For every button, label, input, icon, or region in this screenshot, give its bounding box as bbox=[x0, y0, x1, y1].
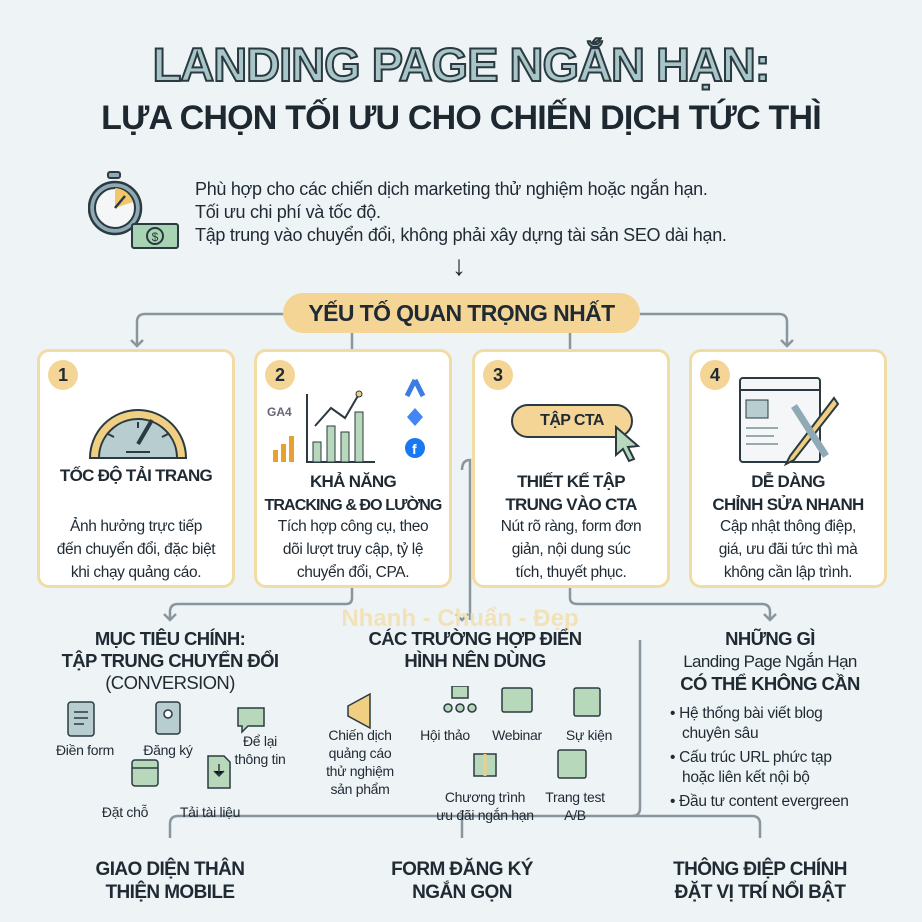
section: use cases: Webinar bbox=[492, 727, 542, 743]
card 4: không cần lập trình. bbox=[724, 564, 852, 581]
intro text: Tối ưu chi phí và tốc độ. bbox=[195, 202, 381, 222]
section: use cases: Trang test bbox=[545, 789, 605, 805]
card 4: giá, ưu đãi tức thì mà bbox=[719, 541, 857, 558]
section: goal: Đăng ký bbox=[143, 742, 193, 758]
section: not needed: • Cấu trúc URL phức tạp bbox=[670, 749, 832, 766]
icon: stopwatch and money: $ bbox=[152, 230, 159, 244]
card 1: đến chuyển đổi, đặc biệt bbox=[57, 541, 215, 558]
card 2: Tích hợp công cụ, theo bbox=[278, 518, 428, 535]
card 1: 1 bbox=[58, 365, 68, 385]
section: use cases: Hội thảo bbox=[420, 727, 470, 743]
bottom heading: form: FORM ĐĂNG KÝ bbox=[391, 859, 533, 880]
section: not needed: • Hệ thống bài viết blog bbox=[670, 705, 822, 722]
section: use cases: sản phẩm bbox=[330, 781, 390, 797]
section: use cases: ưu đãi ngắn hạn bbox=[436, 807, 534, 823]
section: use cases: thử nghiệm bbox=[326, 763, 394, 779]
card 4: DỄ DÀNG bbox=[751, 472, 825, 491]
card 4 bbox=[689, 349, 887, 588]
section: goal bbox=[56, 628, 286, 820]
section: use cases: Sự kiện bbox=[566, 727, 612, 743]
section: not needed: chuyên sâu bbox=[682, 725, 758, 742]
bottom heading: form: NGẮN GỌN bbox=[412, 882, 512, 903]
card 3: TRUNG VÀO CTA bbox=[505, 495, 637, 514]
bottom heading: mobile bbox=[96, 858, 244, 903]
section: use cases: Chương trình bbox=[445, 789, 525, 805]
card 4: 4 bbox=[710, 365, 720, 385]
section: not needed: CÓ THỂ KHÔNG CẦN bbox=[680, 673, 860, 694]
section: use cases: Chiến dịch bbox=[328, 727, 392, 743]
bottom heading: mobile: GIAO DIỆN THÂN bbox=[96, 859, 244, 880]
section: goal: Đặt chỗ bbox=[102, 804, 148, 820]
section: use cases bbox=[326, 628, 612, 823]
card 3: tích, thuyết phục. bbox=[516, 564, 626, 581]
bottom heading: message: THÔNG ĐIỆP CHÍNH bbox=[673, 859, 847, 880]
icon: CTA button with cursor bbox=[511, 404, 633, 438]
card 1 bbox=[37, 349, 235, 588]
card 2: dõi lượt truy cập, tỷ lệ bbox=[283, 541, 423, 558]
section: goal: Để lại bbox=[243, 733, 277, 749]
card 3: THIẾT KẾ TẬP bbox=[517, 472, 625, 491]
section: not needed: • Đầu tư content evergreen bbox=[670, 793, 849, 810]
card 3: 3 bbox=[493, 365, 503, 385]
section: not needed: NHỮNG GÌ bbox=[725, 628, 815, 649]
card 4: Cập nhật thông điệp, bbox=[720, 518, 856, 535]
section: goal: MỤC TIÊU CHÍNH: bbox=[95, 628, 245, 649]
intro text: Tập trung vào chuyển đổi, không phải xây dựng tài sản SEO dài hạn. bbox=[195, 225, 727, 245]
section: use cases: HÌNH NÊN DÙNG bbox=[404, 650, 546, 671]
bottom heading: message bbox=[673, 857, 847, 903]
pill heading bbox=[283, 293, 640, 333]
title: LANDING PAGE NGẮN HẠN: bbox=[153, 38, 769, 91]
title: LỰA CHỌN TỐI ƯU CHO CHIẾN DỊCH TỨC THÌ bbox=[101, 99, 821, 137]
watermark: Nhanh - Chuẩn - Đẹp bbox=[341, 605, 579, 632]
section: goal: (CONVERSION) bbox=[105, 672, 235, 693]
section: use cases: A/B bbox=[564, 807, 586, 823]
card 3 bbox=[472, 349, 670, 588]
card 3: Nút rõ ràng, form đơn bbox=[501, 518, 641, 535]
section: not needed: Landing Page Ngắn Hạn bbox=[683, 652, 857, 671]
intro text bbox=[195, 178, 727, 245]
section: not needed: hoặc liên kết nội bộ bbox=[682, 769, 810, 786]
section: not needed bbox=[670, 628, 860, 810]
title bbox=[101, 37, 821, 137]
icon: analytics chart: f bbox=[412, 441, 417, 457]
bottom heading: mobile: THIỆN MOBILE bbox=[106, 882, 234, 903]
card 1: khi chạy quảng cáo. bbox=[71, 564, 201, 581]
card 1: TỐC ĐỘ TẢI TRANG bbox=[60, 466, 212, 485]
card 1: Ảnh hưởng trực tiếp bbox=[70, 518, 202, 535]
section: goal: TẬP TRUNG CHUYỂN ĐỔI bbox=[62, 650, 278, 671]
card 2: KHẢ NĂNG bbox=[310, 472, 396, 491]
icon: browser with tools bbox=[739, 377, 840, 466]
icon: analytics chart bbox=[267, 378, 426, 463]
icon: speedometer bbox=[89, 409, 187, 459]
card 2: TRACKING & ĐO LƯỜNG bbox=[265, 497, 441, 514]
icons: use cases bbox=[347, 686, 601, 779]
section: use cases: quảng cáo bbox=[329, 745, 391, 761]
icon: CTA button with cursor: TẬP CTA bbox=[540, 412, 604, 429]
section: use cases: CÁC TRƯỜNG HỢP ĐIỂN bbox=[368, 628, 582, 649]
intro text: Phù hợp cho các chiến dịch marketing thử nghiệm hoặc ngắn hạn. bbox=[195, 179, 708, 199]
section: goal: thông tin bbox=[234, 751, 286, 767]
icons: goal actions bbox=[67, 701, 265, 789]
section: goal: Tải tài liệu bbox=[180, 804, 240, 820]
card 2 bbox=[254, 349, 452, 588]
icon: analytics chart: GA4 bbox=[267, 405, 292, 419]
bottom heading: message: ĐẶT VỊ TRÍ NỔI BẬT bbox=[675, 882, 845, 903]
pill heading: YẾU TỐ QUAN TRỌNG NHẤT bbox=[308, 300, 615, 326]
section: goal: Điền form bbox=[56, 742, 114, 758]
card 3: giản, nội dung súc bbox=[512, 541, 630, 558]
arrow down: ↓ bbox=[452, 250, 466, 281]
icon: stopwatch and money bbox=[88, 171, 179, 249]
card 2: chuyển đổi, CPA. bbox=[297, 564, 409, 581]
card 2: 2 bbox=[275, 365, 285, 385]
bottom heading: form bbox=[391, 858, 534, 903]
card 4: CHỈNH SỬA NHANH bbox=[712, 495, 864, 514]
